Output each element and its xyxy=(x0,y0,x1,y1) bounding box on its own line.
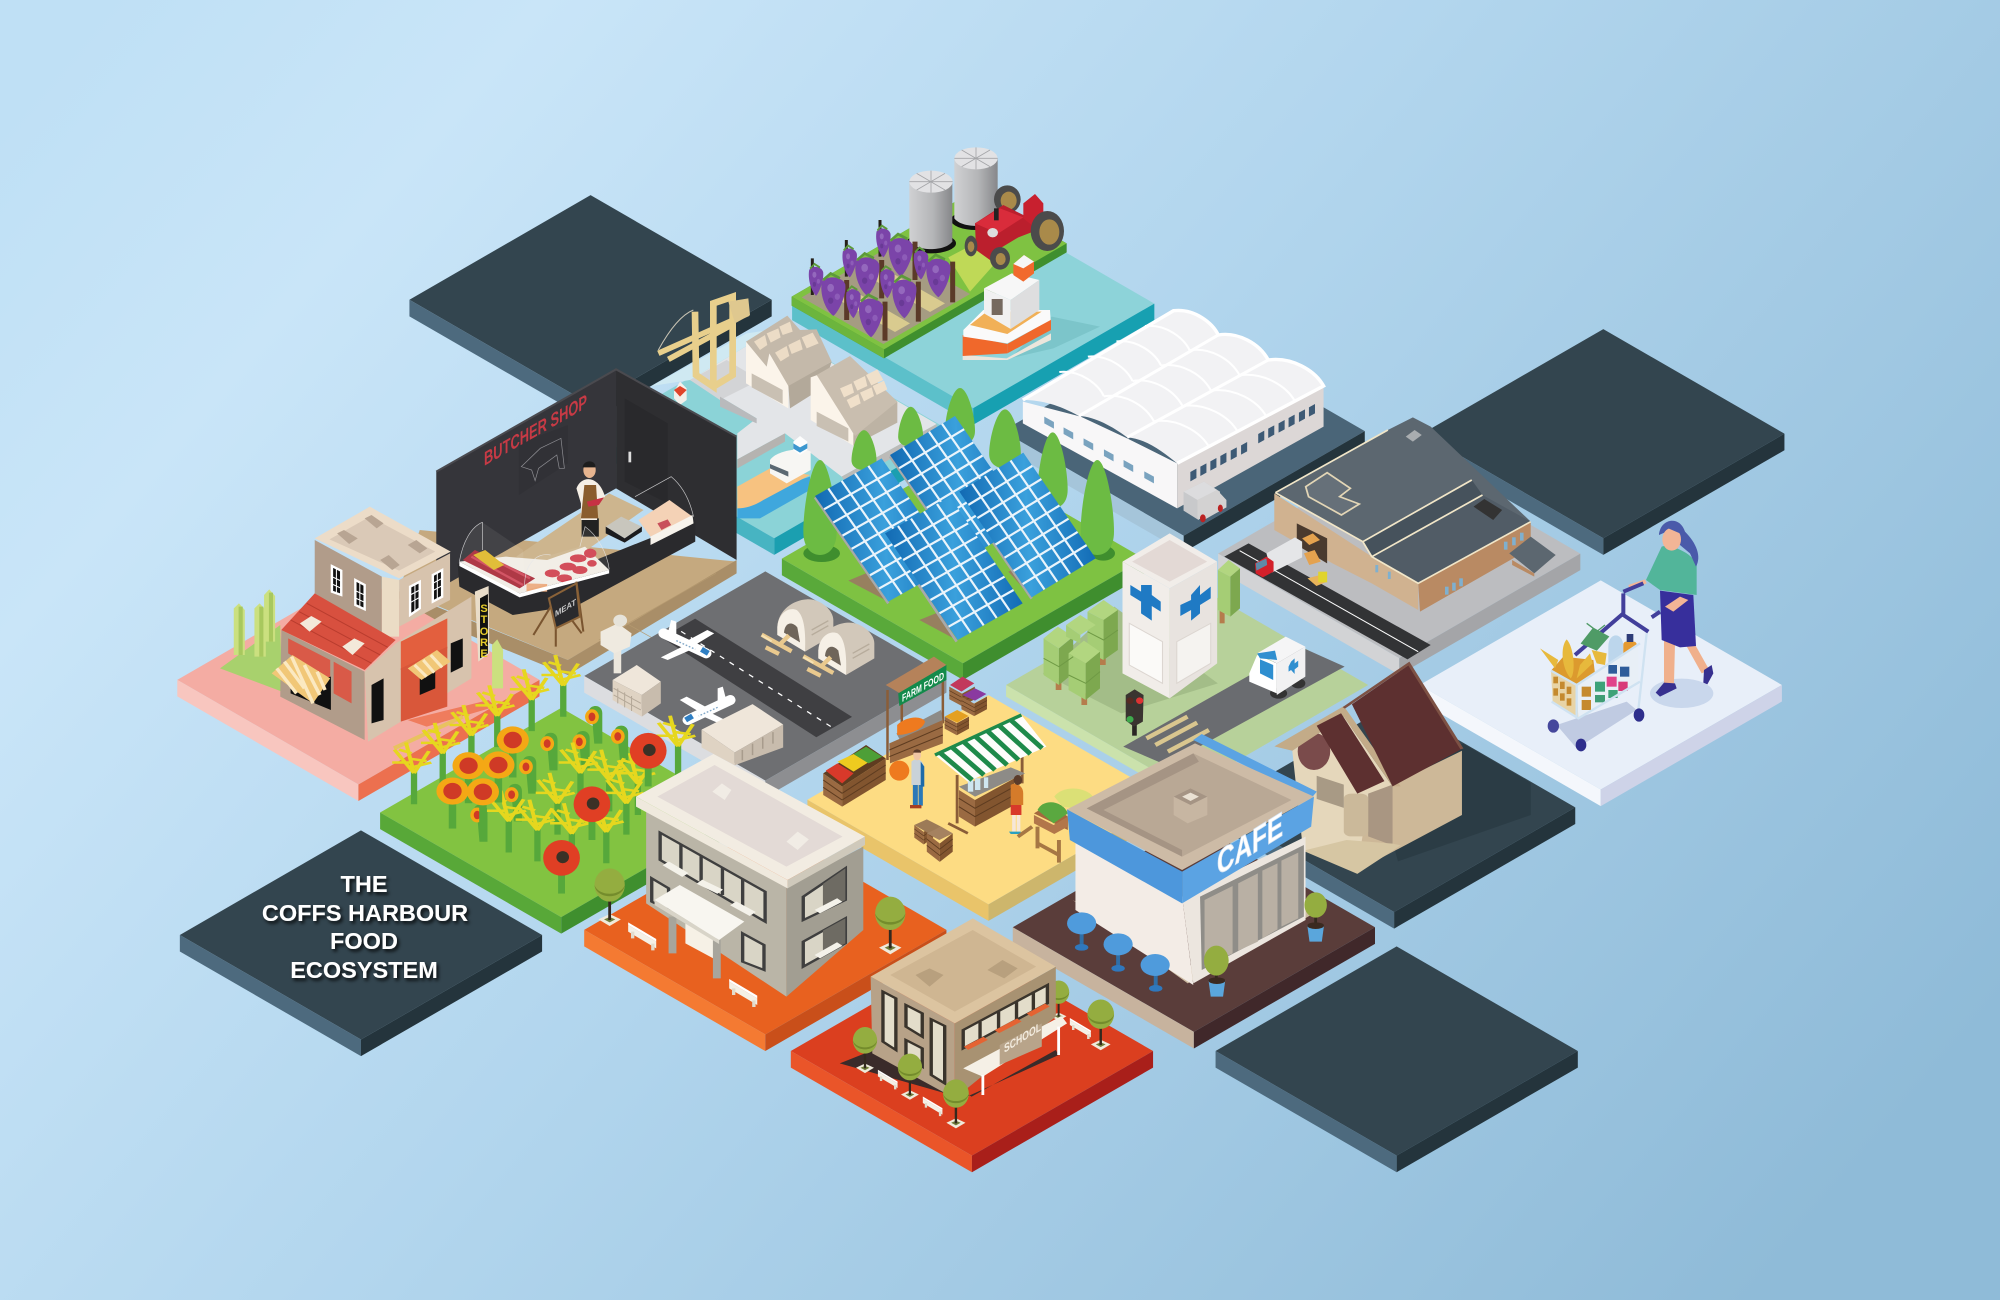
striped awning stall xyxy=(935,715,1046,833)
school canopy and sign xyxy=(963,1016,1067,1077)
school windows xyxy=(883,985,1047,1083)
panel: harbour xyxy=(593,297,955,555)
shop openings xyxy=(291,677,331,710)
shopper tile xyxy=(1420,580,1782,806)
vegetable table xyxy=(1018,789,1093,863)
store sign text: O xyxy=(480,626,489,638)
store sign text: E xyxy=(480,648,488,660)
second terminal xyxy=(702,704,783,765)
building walls xyxy=(646,808,863,997)
red poppies xyxy=(543,733,667,894)
title: FOOD xyxy=(330,928,398,954)
panel: title tile xyxy=(180,830,542,1056)
boat xyxy=(963,255,1100,360)
trees and benches xyxy=(594,868,905,1007)
warehouse base xyxy=(1218,449,1580,675)
ground braces xyxy=(848,567,1032,640)
greenhouse tile xyxy=(1003,327,1365,552)
panel: school on red tile xyxy=(791,918,1153,1172)
wheat stalks xyxy=(392,655,695,865)
solar tile xyxy=(782,454,1144,680)
office windows xyxy=(652,833,845,970)
scale and meat display right xyxy=(606,477,694,545)
title xyxy=(262,871,468,983)
hospital building xyxy=(1122,533,1217,698)
cafe sign text: CAFE xyxy=(1217,804,1283,884)
solar array back xyxy=(890,416,1028,561)
tractor xyxy=(965,185,1064,270)
panel: hospital xyxy=(1006,533,1368,801)
solar array front xyxy=(885,497,1023,640)
warehouse front xyxy=(811,356,897,446)
counter xyxy=(458,520,695,615)
water tile xyxy=(792,199,1154,425)
panel: sunflower and wheat field xyxy=(380,655,742,934)
shop walls xyxy=(436,369,737,590)
striped awnings xyxy=(272,655,330,703)
red truck and forklift xyxy=(1255,533,1327,586)
silos xyxy=(906,147,1001,253)
panel: butcher shop xyxy=(396,369,737,675)
block trees xyxy=(1044,560,1240,705)
trolley xyxy=(1540,583,1660,751)
butcher figure xyxy=(576,461,605,537)
sunflowers xyxy=(436,726,529,829)
panel: warehouse distribution centre xyxy=(1218,417,1580,675)
farm food stall xyxy=(886,657,946,763)
upper windows xyxy=(332,566,442,615)
greenhouse windows xyxy=(1044,404,1315,483)
title: THE xyxy=(340,871,388,897)
meat A-frame board xyxy=(533,582,583,647)
grape vines xyxy=(809,220,953,341)
hangars and light aircraft xyxy=(762,599,874,676)
traffic light xyxy=(1126,689,1144,736)
crates of produce xyxy=(823,677,987,807)
panel: store and lawn on pink tile xyxy=(177,507,540,801)
panel: shopper with trolley xyxy=(1420,521,1782,806)
panel edges xyxy=(815,456,1032,642)
store building xyxy=(272,507,489,742)
panel: empty dark tile bottom right xyxy=(1216,946,1578,1172)
panel: airport xyxy=(584,571,946,797)
house with brown roof xyxy=(1274,664,1531,874)
entrance canopy xyxy=(655,885,744,978)
airport tile xyxy=(584,571,946,797)
shadow and trees behind xyxy=(840,980,1069,1098)
crane xyxy=(658,297,748,387)
runway xyxy=(662,619,852,737)
warehouse with roof lights xyxy=(746,316,832,408)
customer xyxy=(1009,775,1023,834)
meat board text: MEAT xyxy=(555,597,576,619)
store sign text: R xyxy=(480,637,488,649)
greenhouse building xyxy=(1023,310,1324,522)
store sign text: T xyxy=(481,614,488,626)
store sign text: S xyxy=(480,603,488,615)
quay xyxy=(690,329,937,477)
school building xyxy=(871,918,1067,1098)
panel: empty dark tile top left xyxy=(409,195,772,421)
base and walls xyxy=(1073,837,1314,985)
hospital tile xyxy=(1006,580,1368,801)
school sign text: SCHOOL xyxy=(1004,1019,1041,1056)
warehouse building xyxy=(1274,417,1556,612)
solar array right xyxy=(959,453,1096,597)
panel: cafe on brown tile xyxy=(1013,734,1375,1048)
panel: greenhouse on dark tile xyxy=(1003,310,1365,552)
panel: empty dark tile upper right xyxy=(1422,329,1784,555)
shop floor xyxy=(396,530,737,675)
farm food sign text: FARM FOOD xyxy=(902,671,944,705)
title: ECOSYSTEM xyxy=(290,957,438,983)
panel: office building on orange tile xyxy=(584,754,946,1051)
road xyxy=(1224,543,1431,659)
ambulance xyxy=(1249,637,1305,699)
solar array back left xyxy=(815,458,955,602)
conifer trees xyxy=(803,388,1115,562)
panel: farmers market xyxy=(807,657,1170,921)
shopper figure xyxy=(1628,521,1713,708)
red roof xyxy=(281,593,396,670)
vendor man xyxy=(910,749,924,808)
tree shadow and road xyxy=(1043,607,1345,765)
panel: solar farm xyxy=(782,388,1144,680)
panel: empty dark tile under house xyxy=(1213,664,1575,929)
cargo boat xyxy=(737,436,811,518)
title: COFFS HARBOUR xyxy=(262,900,468,926)
office roof xyxy=(636,754,865,888)
panel: farm with vineyard, silos, tractor and boat xyxy=(792,147,1154,425)
lawn and trees xyxy=(220,589,503,692)
stools xyxy=(1067,912,1170,992)
store sign board xyxy=(475,586,489,662)
cafe roof xyxy=(1067,734,1317,903)
potted plants xyxy=(1204,892,1327,997)
butcher shop sign text: BUTCHER SHOP xyxy=(484,391,587,471)
delivery truck xyxy=(1184,482,1226,522)
front path xyxy=(408,697,502,727)
vineyard block with silos, tractor and boat xyxy=(792,147,1100,360)
control tower, terminal and jets xyxy=(601,615,733,727)
trees and benches xyxy=(853,1000,1114,1128)
cow diagram xyxy=(521,438,564,481)
small flowers xyxy=(470,706,628,842)
sack crates xyxy=(914,819,953,862)
harbour water tile xyxy=(593,329,955,555)
meat display left xyxy=(459,522,609,597)
crane trolley and red buoy xyxy=(674,298,750,405)
